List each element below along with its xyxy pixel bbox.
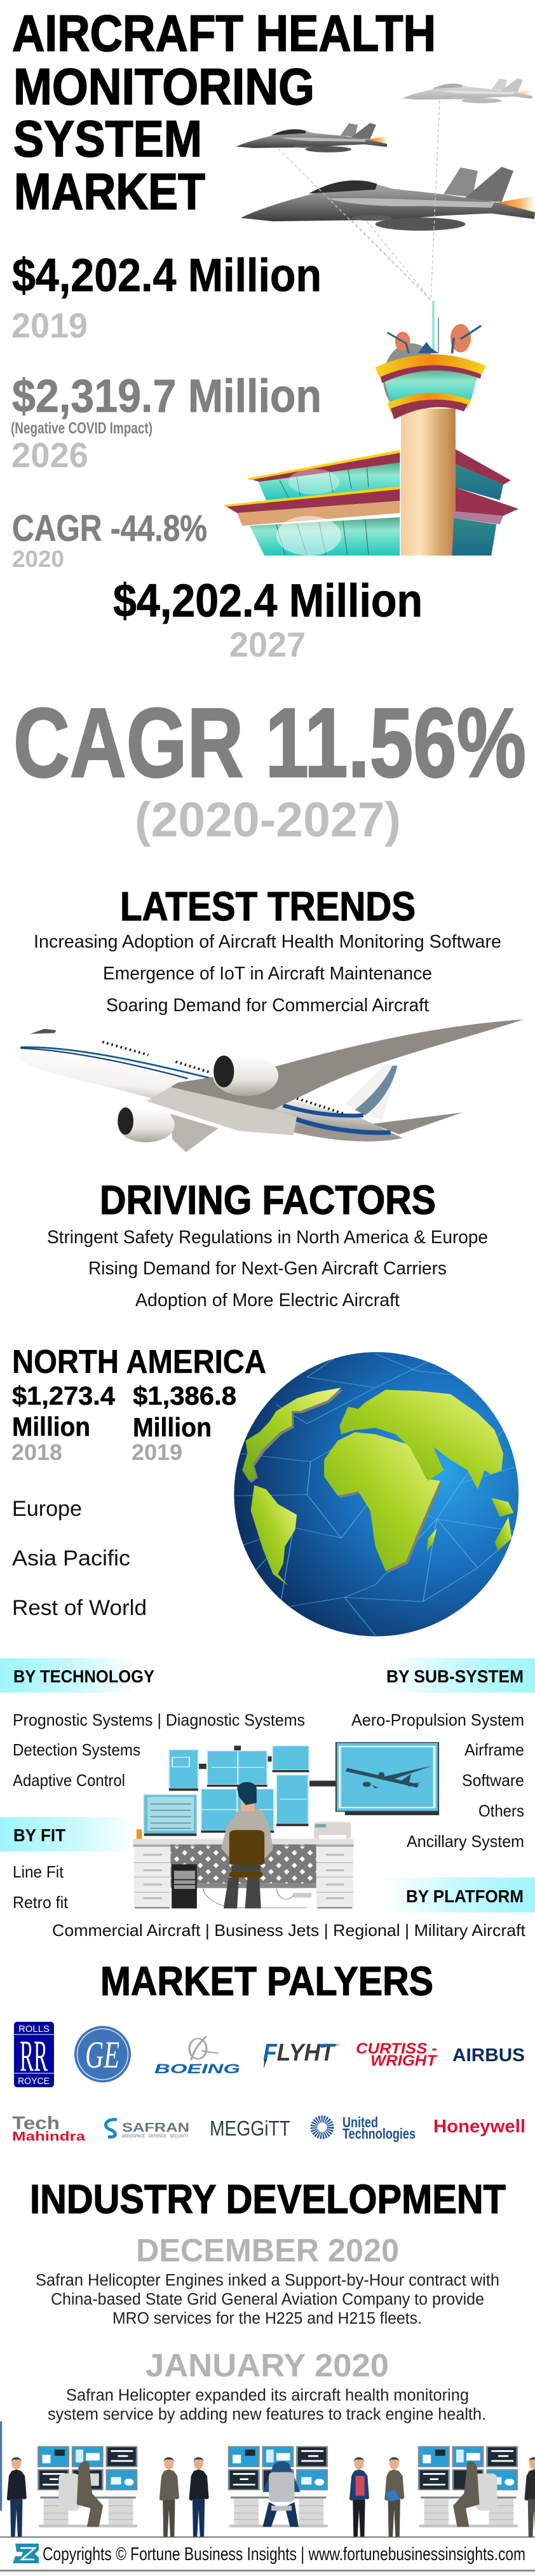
logo: Tech Mahindra: Tech: [12, 2113, 60, 2134]
band: by fit: [0, 1817, 137, 1851]
list: sub-system: Others: [478, 1801, 524, 1820]
list: latest trends: Emergence of IoT in Aircraft Maintenance: [103, 964, 432, 984]
illustration: control tower top: [376, 301, 486, 445]
logo: Boeing: [154, 2036, 240, 2076]
list: latest trends: Increasing Adoption of Aircraft Health Monitoring Software: [34, 932, 501, 952]
heading: latest trends: LATEST TRENDS: [120, 883, 416, 929]
development: January 2020: JANUARY 2020: [146, 2347, 389, 2383]
panel: regional data: Europe: [12, 1497, 82, 1521]
logo: GE: GE: [85, 2034, 119, 2076]
list: driving factors: [47, 1227, 488, 1311]
development: December 2020: MRO services for the H225 and H215 fleets.: [112, 2310, 422, 2327]
stat: CAGR forecast: [13, 688, 526, 847]
title: MARKET: [14, 163, 205, 221]
development: December 2020: [36, 2232, 499, 2327]
value: 2026 market size: $2,319.7 Million: [12, 371, 322, 422]
logo: Fortune Business Insights: [13, 2544, 39, 2563]
title: MONITORING: [13, 58, 315, 116]
panel: regional data: $1,386.8: [133, 1381, 236, 1410]
list: driving factors: Stringent Safety Regulations in North America & Europe: [47, 1227, 488, 1248]
list: sub-system: [351, 1710, 524, 1851]
list: technology: Adaptive Control: [13, 1771, 125, 1790]
value: 2019 market size: [11, 250, 322, 345]
development: January 2020: Safran Helicopter expanded its aircraft health monitoring: [66, 2387, 469, 2404]
band: by sub-system: BY SUB-SYSTEM: [386, 1666, 524, 1686]
list: sub-system: Aero-Propulsion System: [351, 1710, 524, 1729]
panel: regional data: Million: [12, 1412, 90, 1441]
logo: Tech Mahindra: [12, 2113, 86, 2144]
logo: United Technologies: Technologies: [342, 2125, 416, 2142]
logo: Safran: SAFRAN: [122, 2121, 189, 2135]
panel: regional data: Rest of World: [12, 1596, 147, 1620]
stat: CAGR 2020: CAGR -44.8%: [12, 508, 207, 549]
list: latest trends: Soaring Demand for Commercial Aircraft: [106, 995, 429, 1016]
band: by technology: BY TECHNOLOGY: [13, 1666, 154, 1686]
value: 2019 market size: $4,202.4 Million: [12, 250, 322, 301]
logo: Tech Mahindra: Mahindra: [12, 2130, 86, 2144]
panel: regional data: $1,273.4: [12, 1381, 115, 1410]
illustration: airliner: [12, 1019, 524, 1152]
logo: Safran: [105, 2120, 189, 2139]
value: 2027 market size: $4,202.4 Million: [113, 575, 423, 627]
list: technology: Detection Systems: [13, 1740, 140, 1759]
list: sub-system: Airframe: [464, 1740, 524, 1759]
logo: Curtiss-Wright: [356, 2040, 438, 2069]
title: SYSTEM: [13, 111, 202, 168]
development: December 2020: China-based State Grid General Aviation Company to provide: [51, 2291, 484, 2308]
title: AIRCRAFT HEALTH: [12, 5, 436, 62]
illustration: globe: [234, 1352, 518, 1637]
band: by sub-system: [386, 1658, 535, 1693]
development: December 2020: DECEMBER 2020: [136, 2232, 399, 2268]
development: December 2020: Safran Helicopter Engines inked a Support-by-Hour contract with: [36, 2272, 499, 2289]
panel: regional data: 2018: [11, 1440, 62, 1465]
panel: regional data: NORTH AMERICA: [12, 1344, 266, 1380]
panel: regional data: [11, 1344, 266, 1620]
list: sub-system: Software: [462, 1771, 524, 1790]
development: January 2020: system service by adding new features to track engine health.: [48, 2406, 486, 2423]
value: 2026 market size: 2026: [11, 435, 88, 475]
illustration: fighter jets: [236, 78, 535, 231]
list: technology: [13, 1710, 305, 1790]
logo: Airbus: AIRBUS: [452, 2045, 525, 2066]
development: January 2020: [48, 2347, 486, 2423]
logo: Rolls-Royce: RR: [20, 2032, 48, 2081]
title: [12, 5, 436, 221]
logo: Curtiss-Wright: CURTISS -: [356, 2040, 437, 2057]
logo: Rolls-Royce: [14, 2022, 54, 2087]
value: 2019 market size: 2019: [11, 306, 88, 345]
value: 2026 market size: (Negative COVID Impact): [11, 419, 152, 437]
logo: Rolls-Royce: ROLLS: [18, 2024, 50, 2034]
panel: regional data: 2019: [132, 1440, 182, 1465]
list: technology: Prognostic Systems | Diagnostic Systems: [13, 1710, 305, 1729]
logo: GE: [74, 2026, 131, 2082]
list: fit: Line Fit: [13, 1862, 64, 1881]
list: latest trends: [34, 932, 501, 1016]
band: by technology: [0, 1658, 154, 1693]
logo: FLYHT: FLYHT: [263, 2040, 336, 2066]
list: driving factors: Adoption of More Electric Aircraft: [135, 1290, 400, 1311]
band: by fit: BY FIT: [13, 1825, 65, 1845]
logo: United Technologies: United: [342, 2114, 378, 2130]
logo: Honeywell: Honeywell: [433, 2116, 525, 2137]
panel: regional data: Million: [133, 1412, 212, 1442]
list: sub-system: Ancillary System: [407, 1832, 524, 1851]
logo: Boeing: BOEING: [154, 2062, 240, 2076]
band: by platform: BY PLATFORM: [406, 1886, 524, 1906]
heading: market players: MARKET PALYERS: [100, 1958, 433, 2004]
logo: United Technologies: [314, 2114, 416, 2142]
logo: Curtiss-Wright: WRIGHT: [370, 2052, 438, 2069]
panel: regional data: Asia Pacific: [12, 1546, 130, 1571]
list: platform: Commercial Aircraft | Business Jets | Regional | Military Aircraft: [52, 1921, 526, 1940]
value: 2027 market size: [113, 575, 423, 664]
list: fit: [13, 1862, 69, 1912]
value: 2027 market size: 2027: [229, 625, 306, 664]
list: driving factors: Rising Demand for Next-Gen Aircraft Carriers: [88, 1258, 447, 1279]
logo: Rolls-Royce: ROYCE: [18, 2076, 50, 2087]
value: 2026 market size: [11, 371, 322, 475]
illustration: control tower building: [224, 439, 518, 555]
illustration: monitoring desk: [133, 1743, 439, 1909]
list: fit: Retro fit: [13, 1893, 69, 1912]
heading: driving factors: DRIVING FACTORS: [100, 1177, 436, 1223]
stat: CAGR 2020: 2020: [12, 546, 64, 572]
logo: Safran: AEROSPACE · DEFENCE · SECURITY: [122, 2134, 189, 2139]
stat: CAGR 2020: [12, 508, 207, 572]
band: by platform: [386, 1877, 535, 1912]
logo: Meggitt: MEGGiTT: [210, 2116, 290, 2140]
illustration: control room staff: [0, 2421, 535, 2537]
stat: CAGR forecast: (2020-2027): [135, 793, 401, 847]
tracking beams: [278, 100, 440, 301]
